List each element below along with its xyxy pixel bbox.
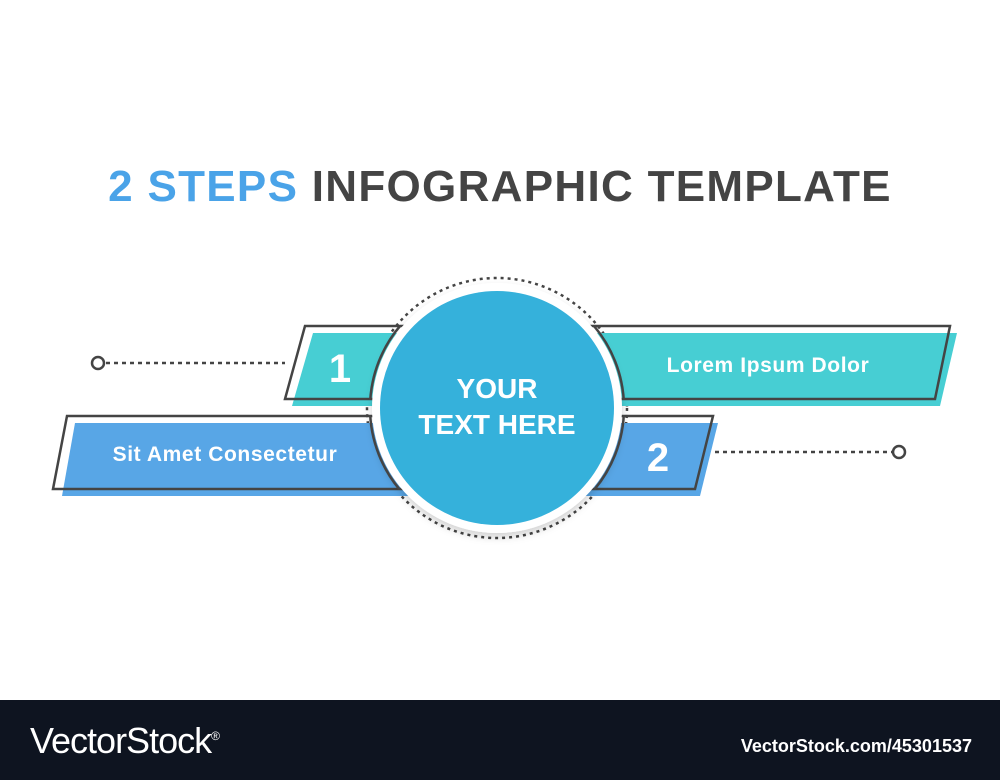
connector: left dotted line — [92, 357, 285, 369]
step 2 bar: 2 — [647, 436, 669, 480]
connector: right dotted line — [715, 446, 905, 458]
step 1 bar: 1 — [329, 347, 351, 391]
center circle: TEXT HERE — [418, 409, 576, 440]
center circle: YOUR — [457, 373, 537, 404]
title: 2 STEPS INFOGRAPHIC TEMPLATE — [108, 162, 892, 211]
step 1 bar: Lorem Ipsum Dolor — [667, 354, 869, 377]
step 2 bar: Sit Amet Consectetur — [113, 443, 337, 466]
step 2 bar — [53, 416, 718, 496]
center circle — [370, 281, 624, 535]
footer logo: VectorStock® — [30, 720, 219, 761]
footer bar — [0, 700, 1000, 780]
footer url: VectorStock.com/45301537 — [741, 736, 972, 756]
dotted ring — [367, 278, 627, 538]
diagram — [52, 276, 957, 540]
step 1 bar — [285, 326, 957, 406]
